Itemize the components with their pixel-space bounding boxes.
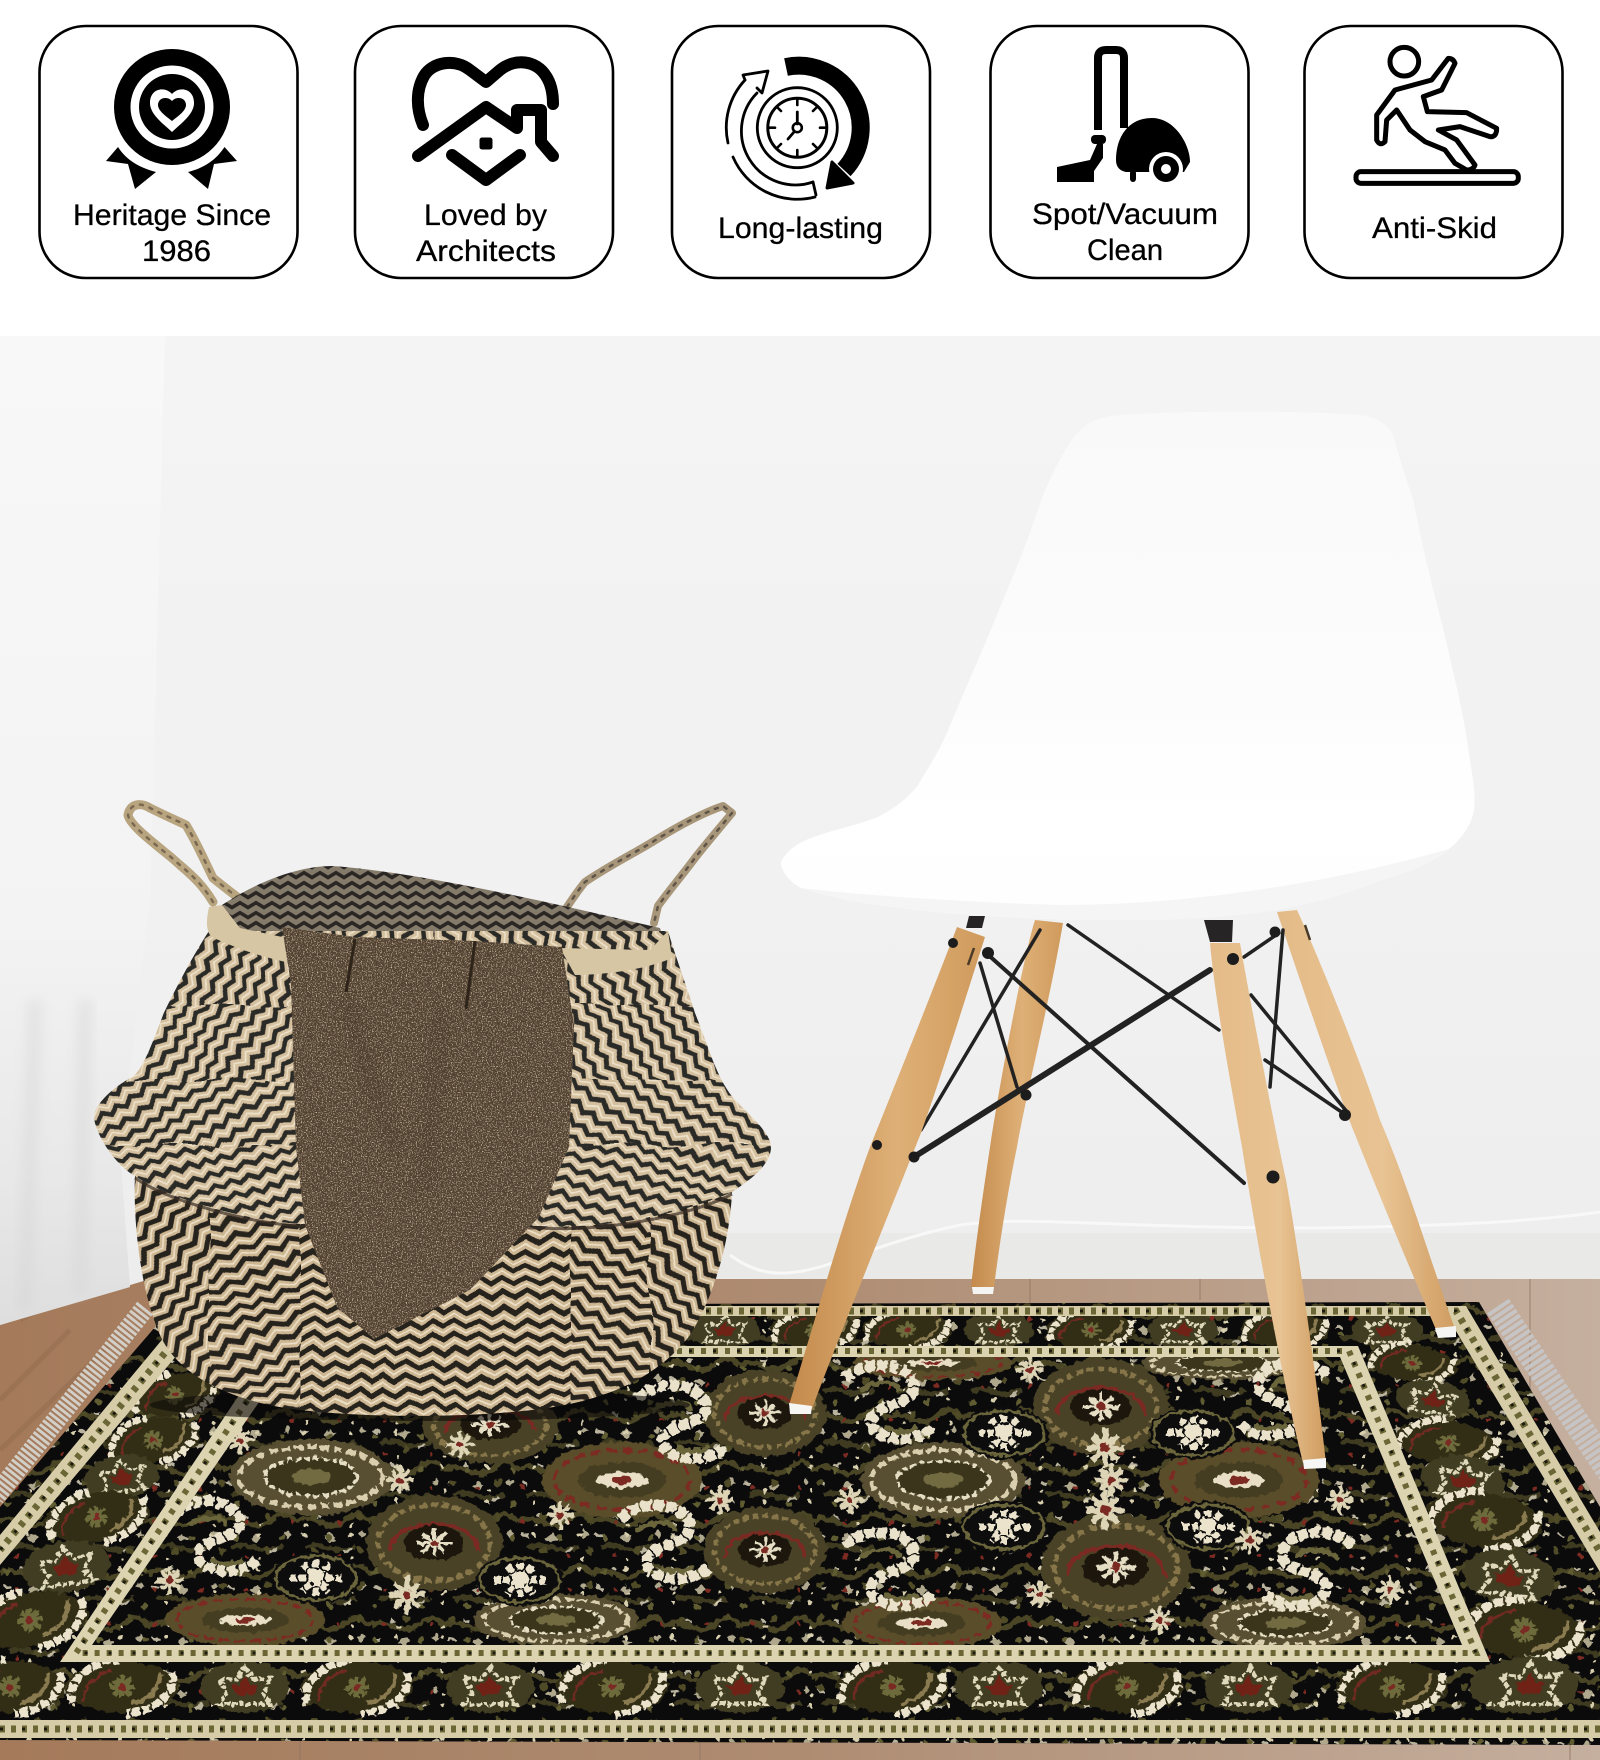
feature card: Loved by Architects: [355, 26, 613, 278]
chair seat lip shading: [801, 849, 1449, 920]
rug all-over vines and speckle: [0, 1300, 1600, 1750]
curtain: [0, 336, 165, 1325]
bottom border paisleys: [0, 1660, 1558, 1714]
feature card: Heritage Since 1986: [40, 26, 298, 278]
rug inner cream band: [60, 1346, 1490, 1662]
basket lower body: [134, 1176, 732, 1416]
feature card: Anti-Skid: [1304, 26, 1562, 278]
wall: [0, 336, 1600, 1286]
basket interior: [222, 866, 668, 955]
chair wire base: [914, 925, 1348, 1183]
field scrolls and flowers: [156, 1356, 1404, 1634]
icon: clock with circular arrows: [726, 66, 861, 199]
basket: [70, 805, 795, 1440]
rug outer cream band: [0, 1306, 1600, 1738]
basket upper body: [94, 931, 771, 1227]
label: Heritage Since 1986: Heritage Since: [73, 199, 271, 232]
baseboard: [150, 1212, 1600, 1279]
chair shell: [781, 412, 1475, 920]
chair black mounts: [966, 916, 1233, 942]
label: Heritage Since 1986: 1986: [142, 235, 211, 268]
rug motifs: [0, 1300, 1600, 1750]
chair leg slots: [968, 925, 1310, 965]
chair front legs: [789, 927, 1326, 1469]
label: Loved by Architects: [416, 199, 556, 268]
wood floor: [0, 1279, 1600, 1760]
top border paisleys: [690, 1316, 1424, 1348]
label: Long-lasting: Long-lasting: [718, 212, 883, 245]
basket shadow: [150, 1389, 690, 1421]
chair bolts: [872, 926, 1351, 1184]
chair: [781, 412, 1475, 1469]
icon: vacuum cleaner: [1057, 50, 1190, 186]
label: Loved by Architects: Loved by: [424, 199, 547, 232]
rug base: [0, 1302, 1600, 1745]
rug: [0, 1300, 1600, 1750]
basket handles: [128, 805, 732, 931]
icon: slipping person: [1356, 47, 1518, 183]
label: Spot/Vacuum Clean: Spot/Vacuum: [1032, 198, 1218, 231]
rug fringe right: [1498, 1306, 1600, 1472]
label: Spot/Vacuum Clean: Clean: [1087, 234, 1163, 267]
rug fringe left: [0, 1308, 145, 1497]
label: Loved by Architects: Architects: [416, 235, 556, 268]
icon: heart with house roof: [418, 62, 553, 180]
label: Heritage Since 1986: [73, 199, 271, 268]
basket rim: [207, 905, 672, 975]
field medallions: [165, 1346, 1367, 1650]
feature card: Long-lasting: [672, 26, 930, 278]
cloth: [282, 927, 574, 1339]
left border paisleys: [0, 1367, 222, 1656]
feature card: Spot/Vacuum Clean: [990, 26, 1248, 278]
chair rear legs: [971, 910, 1456, 1338]
right border paisleys: [1365, 1338, 1589, 1714]
icon: award rosette with heart: [106, 49, 237, 189]
basket waist shadow: [135, 1178, 732, 1229]
label: Anti-Skid: Anti-Skid: [1372, 212, 1497, 245]
label: Spot/Vacuum Clean: [1032, 198, 1218, 267]
